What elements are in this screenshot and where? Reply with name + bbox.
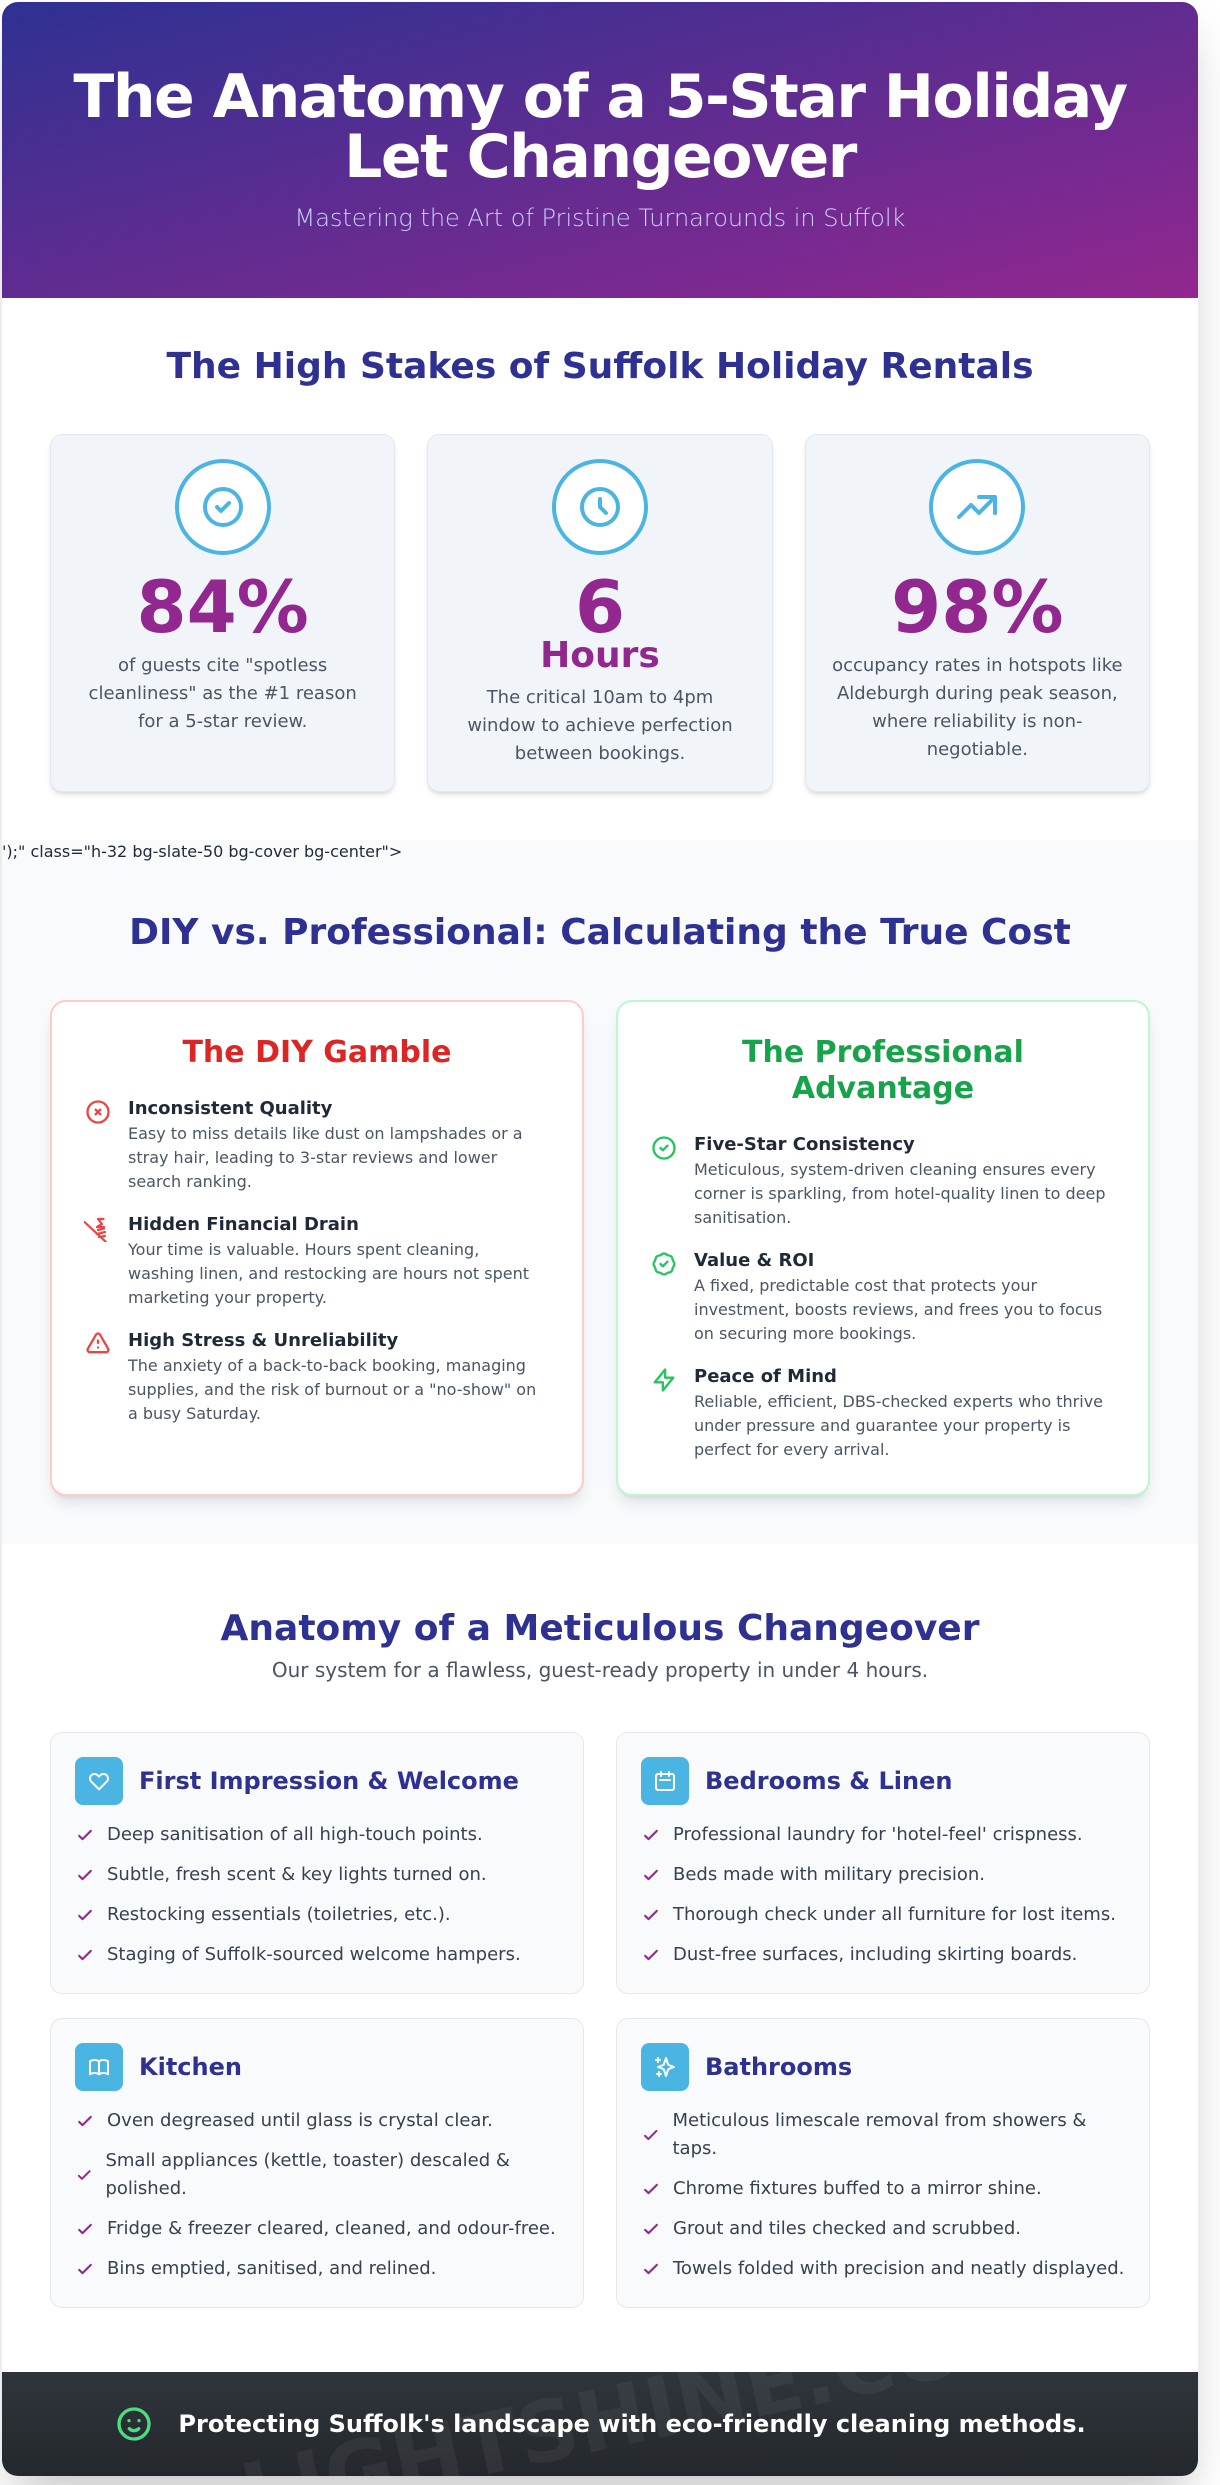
stat number: 6 hours: Hours	[540, 635, 660, 676]
stat description: The critical 10am to 4pm window to achieve perfection between bookings.	[467, 687, 733, 764]
card title: Kitchen	[139, 2053, 242, 2081]
panel: DIY gamble	[50, 1000, 584, 1496]
card header	[75, 1757, 519, 1805]
checklist	[78, 1824, 521, 1965]
card title: First Impression & Welcome	[139, 1767, 519, 1795]
stat number: 6 hours: 6	[575, 565, 625, 649]
item text: Value & ROI	[694, 1250, 814, 1271]
item text: Meticulous, system-driven cleaning ensures every corner is sparkling, from hotel-quality linen to deep sanitisation.	[694, 1160, 1106, 1227]
panel heading: professional: The Professional Advantage	[742, 1035, 1024, 1106]
checklist	[644, 1824, 1116, 1965]
item text: A fixed, predictable cost that protects your investment, boosts reviews, and frees you to focus on securing more bookings.	[694, 1276, 1102, 1343]
footer banner	[2, 2372, 1198, 2476]
icon: sparkles	[641, 2043, 689, 2091]
comparison panels	[49, 1000, 1151, 1506]
item text: The anxiety of a back-to-back booking, managing supplies, and the risk of burnout or a "no-show" on a busy Saturday.	[128, 1356, 536, 1423]
item text: High Stress & Unreliability	[128, 1330, 398, 1351]
icon: warning triangle	[86, 1332, 110, 1354]
icon: struck-through pound	[84, 1218, 108, 1242]
card: kitchen	[50, 2018, 584, 2308]
icon: open book	[75, 2043, 123, 2091]
item text: Easy to miss details like dust on lampshades or a stray hair, leading to 3-star reviews and lower search ranking.	[128, 1124, 523, 1191]
item: hidden financial drain	[84, 1214, 529, 1307]
checklist: Meticulous limescale removal from showers & taps.	[672, 2110, 1086, 2159]
panel: professional advantage	[616, 1000, 1150, 1496]
checklist: Fridge & freezer cleared, cleaned, and odour-free.	[107, 2218, 556, 2239]
checklist: Subtle, fresh scent & key lights turned on.	[107, 1864, 487, 1885]
card header	[641, 1757, 952, 1805]
heading: high stakes: The High Stakes of Suffolk Holiday Rentals	[166, 346, 1034, 387]
checklist: Grout and tiles checked and scrubbed.	[673, 2218, 1021, 2239]
section: high stakes	[49, 346, 1151, 796]
checklist: Professional laundry for 'hotel-feel' crispness.	[673, 1824, 1083, 1845]
heading: anatomy: Anatomy of a Meticulous Changeover	[221, 1608, 979, 1649]
card title: Bathrooms	[705, 2053, 852, 2081]
icon: calendar	[641, 1757, 689, 1805]
checklist: Oven degreased until glass is crystal clear.	[107, 2110, 493, 2131]
item: high stress	[86, 1330, 536, 1423]
icon: badge check	[652, 1252, 676, 1276]
checklist	[644, 2110, 1124, 2279]
card header	[641, 2043, 852, 2091]
stat description: occupancy rates in hotspots like Aldeburgh during peak season, where reliability is non-negotiable.	[832, 655, 1123, 760]
stat card: 98%	[805, 434, 1150, 792]
checklist: Towels folded with precision and neatly displayed.	[673, 2258, 1124, 2279]
title: The Anatomy of a 5-Star Holiday Let Changeover	[73, 62, 1127, 192]
card: bathrooms	[616, 2018, 1150, 2308]
item: five-star consistency	[652, 1134, 1106, 1227]
item: inconsistent quality	[86, 1098, 523, 1191]
stray markup text: ');" class="h-32 bg-slate-50 bg-cover bg-center">	[2, 842, 402, 861]
checklist: Small appliances (kettle, toaster) descaled & polished.	[105, 2150, 510, 2199]
item text: Your time is valuable. Hours spent cleaning, washing linen, and restocking are hours not spent marketing your property.	[128, 1240, 529, 1307]
checklist: Beds made with military precision.	[673, 1864, 985, 1885]
checklist: Staging of Suffolk-sourced welcome hampers.	[107, 1944, 521, 1965]
card title: Bedrooms & Linen	[705, 1767, 952, 1795]
header banner	[2, 2, 1198, 298]
item text: Hidden Financial Drain	[128, 1214, 359, 1235]
section: meticulous changeover	[50, 1608, 1150, 2308]
icon: smiley	[117, 2407, 151, 2441]
stat number: 6 hours	[540, 565, 660, 676]
section subtitle: Our system for a flawless, guest-ready property in under 4 hours.	[272, 1658, 928, 1682]
icon: check circle	[652, 1136, 676, 1160]
stray markup text	[2, 840, 1198, 864]
card: first impression	[50, 1732, 584, 1994]
item text: Inconsistent Quality	[128, 1098, 332, 1119]
stat number: 98%: 98%	[891, 565, 1064, 649]
heading: DIY vs professional: DIY vs. Professional: Calculating the True Cost	[129, 912, 1071, 953]
item: peace of mind	[654, 1366, 1103, 1459]
icon: heart	[75, 1757, 123, 1805]
stat card: 6 hours	[427, 434, 773, 792]
checklist: Dust-free surfaces, including skirting boards.	[673, 1944, 1077, 1965]
subtitle: Mastering the Art of Pristine Turnarounds in Suffolk	[295, 204, 905, 232]
checklist: Chrome fixtures buffed to a mirror shine.	[673, 2178, 1042, 2199]
checklist: Restocking essentials (toiletries, etc.).	[107, 1904, 451, 1925]
checklist	[78, 2110, 556, 2279]
stat card: 84%	[50, 434, 395, 792]
icon: clock	[552, 459, 648, 555]
stat number: 84%: 84%	[136, 565, 309, 649]
item text: Reliable, efficient, DBS-checked experts who thrive under pressure and guarantee your property is perfect for every arrival.	[694, 1392, 1103, 1459]
checklist: Deep sanitisation of all high-touch points.	[107, 1824, 483, 1845]
card header	[75, 2043, 242, 2091]
item: value and ROI	[652, 1250, 1102, 1343]
checklist: Thorough check under all furniture for lost items.	[673, 1904, 1116, 1925]
stat cards	[49, 434, 1151, 796]
icon: check circle	[175, 459, 271, 555]
card: bedrooms	[616, 1732, 1150, 1994]
icon: trending up	[929, 459, 1025, 555]
checklist cards	[50, 1732, 1150, 2308]
item text: Peace of Mind	[694, 1366, 837, 1387]
footer message: Protecting Suffolk's landscape with eco-friendly cleaning methods.	[178, 2410, 1086, 2438]
panel heading: DIY: The DIY Gamble	[182, 1035, 452, 1070]
icon: x circle	[86, 1100, 110, 1124]
item text: Five-Star Consistency	[694, 1134, 915, 1155]
checklist: Bins emptied, sanitised, and relined.	[107, 2258, 436, 2279]
section: DIY vs professional	[2, 864, 1198, 1544]
stat description: of guests cite "spotless cleanliness" as the #1 reason for a 5-star review.	[89, 655, 357, 732]
icon: lightning bolt	[654, 1368, 674, 1392]
